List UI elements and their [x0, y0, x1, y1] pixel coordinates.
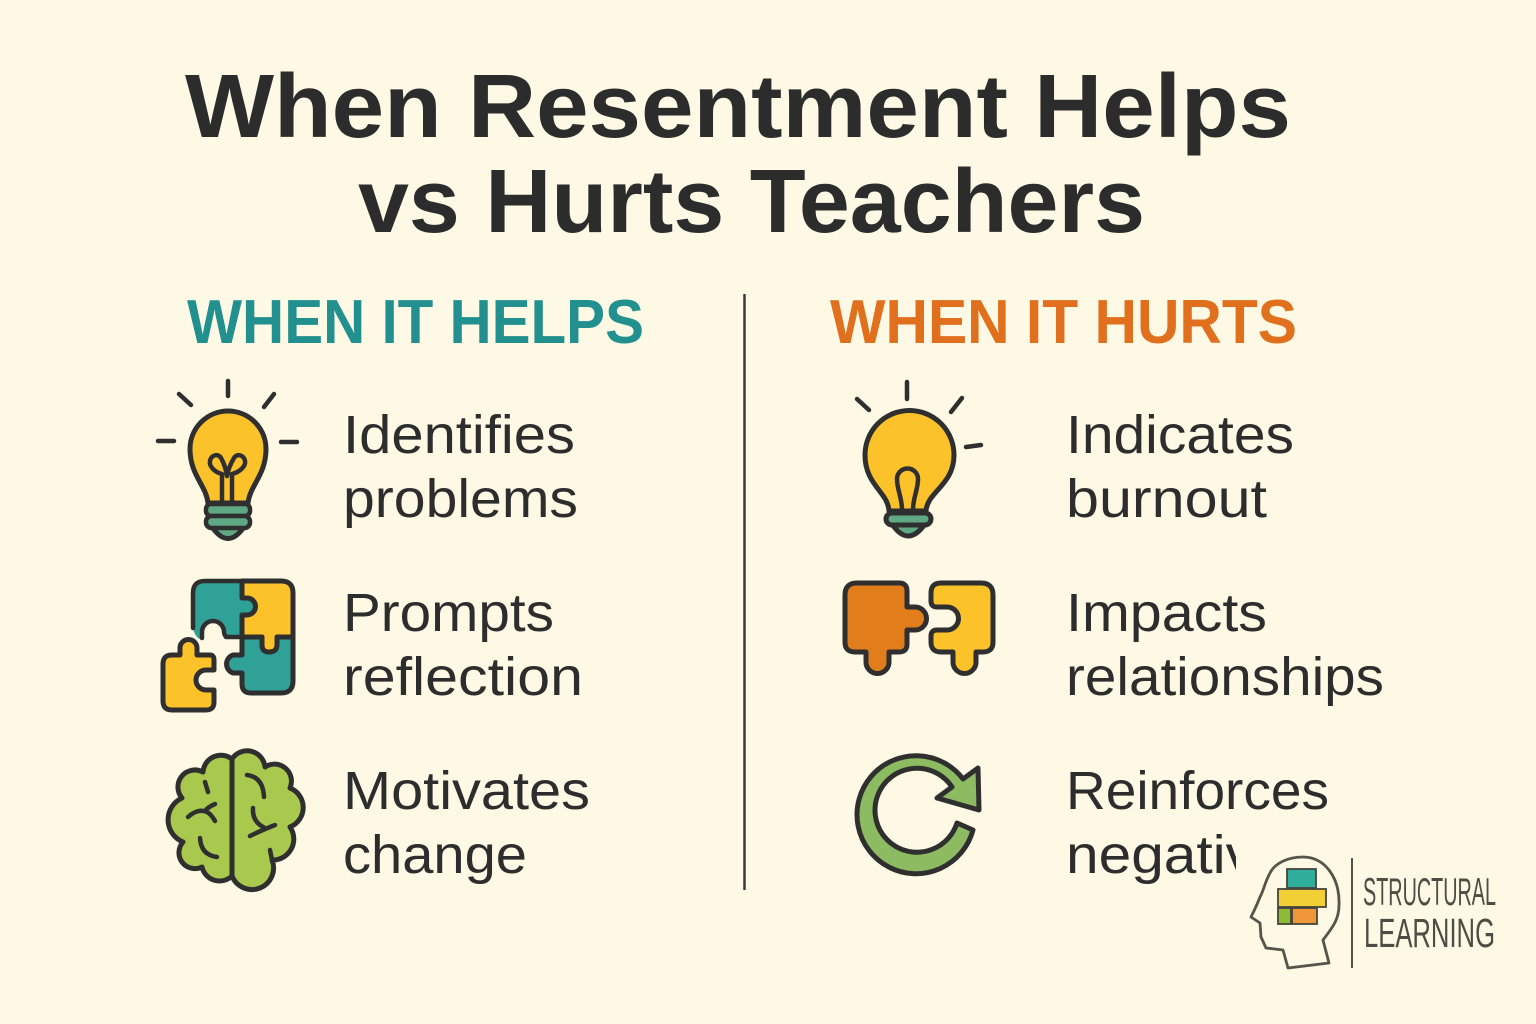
text: motivates change: Motivates	[343, 761, 590, 821]
icon: two separated puzzle pieces	[845, 583, 993, 674]
text: indicates burnout: burnout	[1066, 469, 1267, 529]
text: motivates change: change	[343, 825, 527, 885]
title	[185, 57, 1291, 252]
text: indicates burnout	[1066, 405, 1294, 529]
text: indicates burnout: Indicates	[1066, 405, 1294, 465]
text: impacts relationships: relationships	[1066, 647, 1384, 707]
heading: when it hurts: WHEN IT HURTS	[830, 288, 1297, 357]
heading: when it helps: WHEN IT HELPS	[187, 288, 644, 357]
text: prompts reflection	[343, 583, 583, 707]
text: impacts relationships	[1066, 583, 1384, 707]
icon: brain	[168, 751, 303, 890]
icon: light bulb with rays	[158, 381, 297, 538]
text: motivates change	[343, 761, 590, 885]
icon: circular arrow	[857, 756, 979, 874]
title: When Resentment Helps	[185, 57, 1291, 157]
text: identifies problems	[343, 405, 578, 529]
logo wordmark	[1363, 871, 1496, 956]
text: identifies problems: Identifies	[343, 405, 575, 465]
text: impacts relationships: Impacts	[1066, 583, 1267, 643]
text: identifies problems: problems	[343, 469, 578, 529]
logo head with blocks	[1251, 857, 1339, 968]
text: prompts reflection: Prompts	[343, 583, 554, 643]
text: reinforces negative: negativ	[1066, 825, 1255, 885]
text: prompts reflection: reflection	[343, 647, 583, 707]
text: reinforces negative	[1066, 761, 1329, 885]
title: vs Hurts Teachers	[358, 152, 1145, 252]
icon: light bulb, right column	[857, 382, 981, 536]
text: reinforces negative: Reinforces	[1066, 761, 1329, 821]
logo: structural learning	[1251, 857, 1496, 968]
icon: puzzle with four pieces	[163, 581, 293, 710]
